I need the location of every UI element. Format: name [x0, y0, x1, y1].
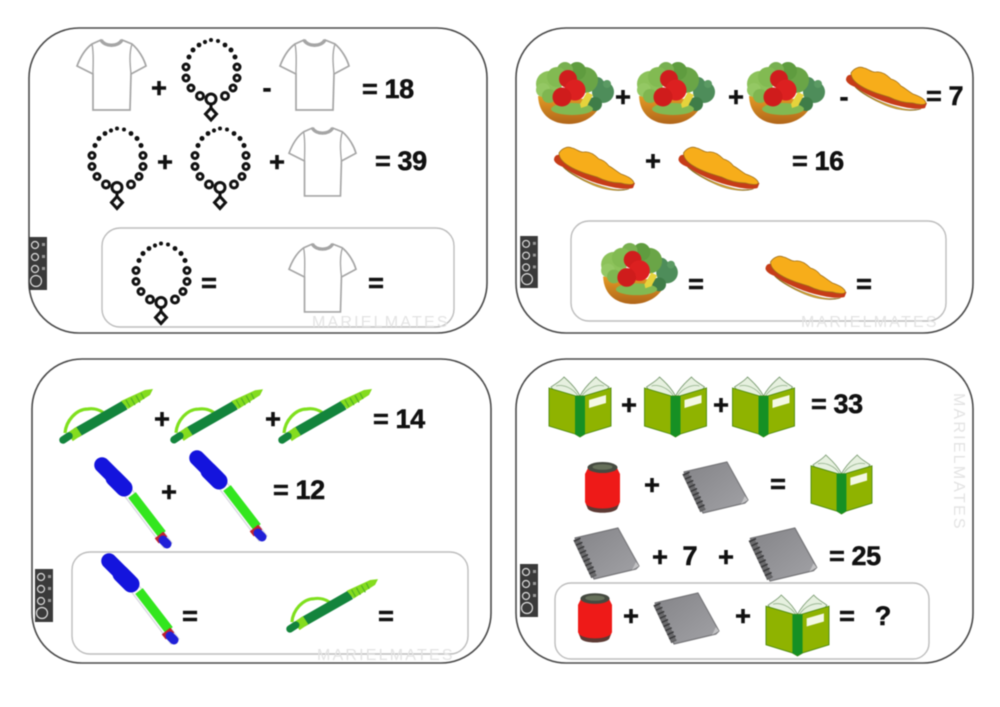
minus sign: - [262, 73, 272, 103]
result: 33: = 33 [811, 389, 863, 419]
plus sign: + [151, 73, 167, 103]
icon: pen [282, 389, 372, 440]
icon: book [644, 377, 706, 437]
number 7: 7 [682, 541, 698, 571]
licence badge [520, 564, 538, 617]
answer box [555, 583, 929, 659]
result: 14: = 14 [373, 404, 425, 434]
plus sign: + [265, 404, 281, 434]
equals sign: = [378, 601, 394, 631]
answer icon: notebook [655, 593, 719, 644]
plus sign: + [718, 542, 734, 572]
icon: notebook [575, 528, 639, 579]
plus sign: + [157, 147, 173, 177]
plus sign: + [269, 147, 285, 177]
icon: necklace [183, 38, 240, 120]
equals sign: = [368, 268, 384, 298]
plus sign: + [713, 390, 729, 420]
equals sign: = [688, 269, 704, 299]
answer box [72, 552, 468, 654]
watermark: MARIELMATES [801, 314, 939, 331]
watermark: MARIELMATES [312, 314, 450, 331]
icon: book [549, 377, 611, 437]
plus sign: + [615, 82, 631, 112]
question mark: ? [875, 601, 891, 631]
panel frame [516, 359, 973, 663]
plus sign: + [652, 542, 668, 572]
result: 25: = 25 [829, 541, 881, 571]
icon: salad [637, 62, 715, 124]
result: 7: = 7 [926, 81, 963, 111]
equals sign: = [856, 269, 872, 299]
icon: salad [747, 62, 825, 124]
plus sign: + [645, 146, 661, 176]
answer box [571, 221, 946, 321]
answer icon: marker [109, 561, 179, 644]
result: 39: = 39 [375, 146, 427, 176]
icon: notebook [750, 528, 817, 581]
result: 18: = 18 [362, 74, 414, 104]
icon: salad [536, 62, 614, 124]
answer icon: can [578, 593, 612, 643]
licence badge [29, 237, 47, 290]
plus sign: + [621, 390, 637, 420]
vertical watermark: MARIELMATES [950, 393, 967, 531]
icon: shirt [280, 40, 349, 110]
plus sign: + [154, 404, 170, 434]
equals sign: = [770, 469, 786, 499]
answer icon: sandwich [766, 256, 846, 299]
panel frame [32, 359, 491, 663]
answer icon: shirt [289, 244, 356, 312]
equals sign: = [839, 601, 855, 631]
panel: book, can and notebook puzzle [516, 359, 973, 663]
panel frame [29, 28, 487, 333]
answer icon: book [766, 595, 829, 656]
result: 16: = 16 [792, 146, 844, 176]
panel: shirt and necklace puzzle [29, 28, 487, 333]
minus sign: - [840, 82, 848, 112]
icon: marker [102, 465, 172, 548]
panel: pen and marker puzzle [32, 359, 491, 664]
plus sign: + [735, 601, 751, 631]
icon: can [585, 462, 620, 513]
icon: book [811, 455, 872, 514]
plus sign: + [644, 470, 660, 500]
icon: necklace [89, 126, 146, 208]
icon: necklace [192, 126, 249, 208]
plus sign: + [728, 82, 744, 112]
icon: pen [63, 389, 153, 440]
watermark: MARIELMATES [317, 647, 455, 664]
licence badge [35, 569, 53, 622]
answer icon: salad [601, 243, 678, 304]
plus sign: + [623, 601, 639, 631]
plus sign: + [161, 477, 177, 507]
icon: marker [197, 458, 267, 541]
icon: pen [174, 389, 263, 440]
equals sign: = [182, 601, 198, 631]
icon: sandwich [846, 67, 927, 110]
answer icon: pen [290, 579, 378, 629]
icon: sandwich [554, 147, 635, 190]
icon: sandwich [678, 147, 760, 190]
equals sign: = [201, 268, 217, 298]
result: 12: = 12 [273, 475, 325, 505]
icon: notebook [684, 462, 748, 513]
answer box [102, 228, 454, 327]
icon: shirt [77, 40, 146, 110]
icon: shirt [289, 128, 356, 196]
panel: salad and sandwich puzzle [516, 28, 973, 333]
panel frame [516, 28, 973, 333]
licence badge [520, 236, 538, 288]
icon: book [732, 377, 794, 437]
answer icon: necklace [133, 242, 190, 324]
